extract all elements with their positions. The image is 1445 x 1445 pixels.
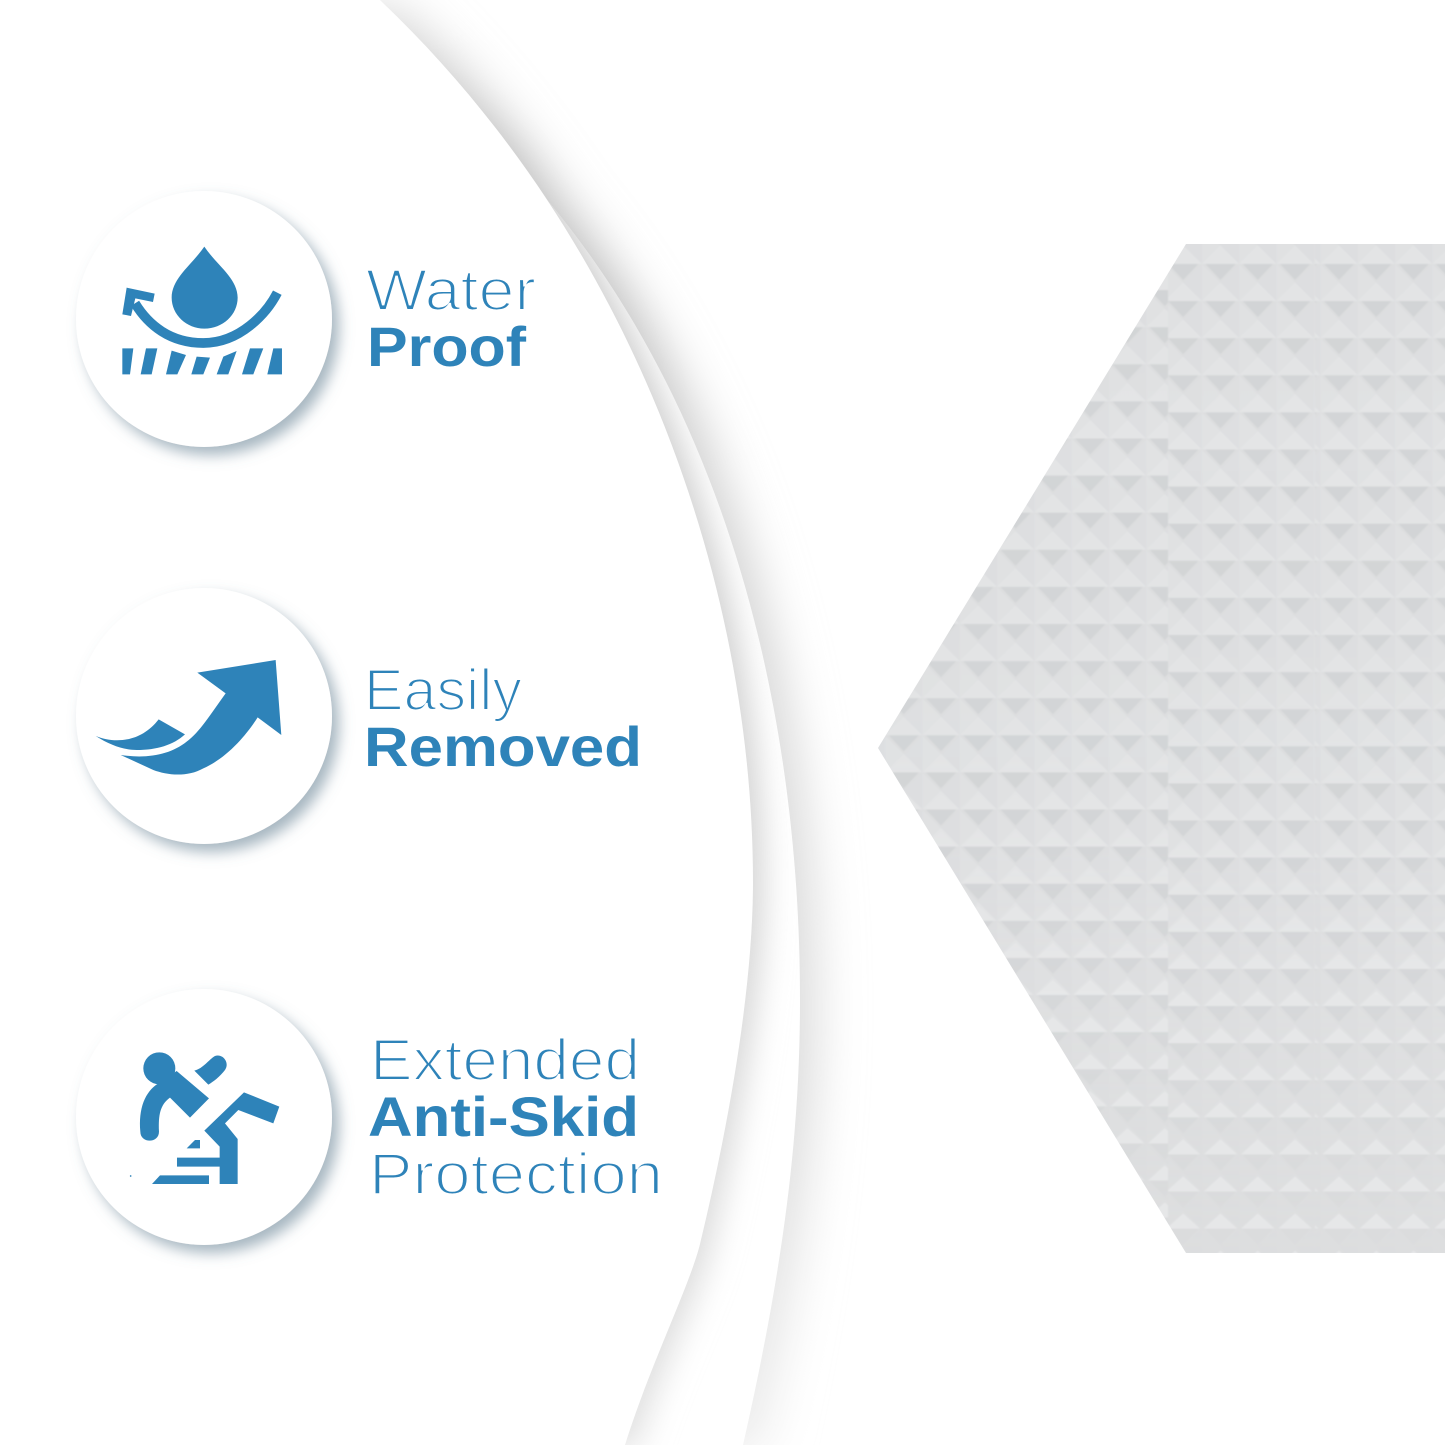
- label: Water Proof: Proof: [367, 315, 526, 378]
- icon: person slipping on stairs: [130, 1052, 279, 1184]
- label: Extended Anti-Skid Protection: Extended: [370, 1028, 640, 1093]
- label: Extended Anti-Skid Protection: [368, 1028, 663, 1207]
- feature: extended anti-skid protection: [76, 989, 663, 1245]
- feature: easily removed: [76, 588, 642, 844]
- textured pad hexagon swatch: [870, 240, 1445, 1260]
- label: Water Proof: [366, 258, 536, 378]
- label: Extended Anti-Skid Protection: Anti-Skid: [368, 1085, 639, 1148]
- icon: water drop repelled from fabric: [122, 247, 282, 374]
- label: Water Proof: Water: [366, 258, 536, 323]
- icon circle: water proof: [76, 191, 332, 447]
- label: Easily Removed: Easily: [364, 658, 522, 723]
- label: Extended Anti-Skid Protection: Protection: [369, 1142, 663, 1207]
- label: Easily Removed: Removed: [364, 715, 642, 778]
- curved layered panel with shadows: [380, 0, 833, 1445]
- icon: upward swoosh arrow: [96, 660, 281, 775]
- icon circle: anti-skid: [76, 989, 332, 1245]
- feature: water proof: [76, 191, 536, 447]
- label: Easily Removed: [364, 658, 642, 778]
- icon circle: easily removed: [76, 588, 332, 844]
